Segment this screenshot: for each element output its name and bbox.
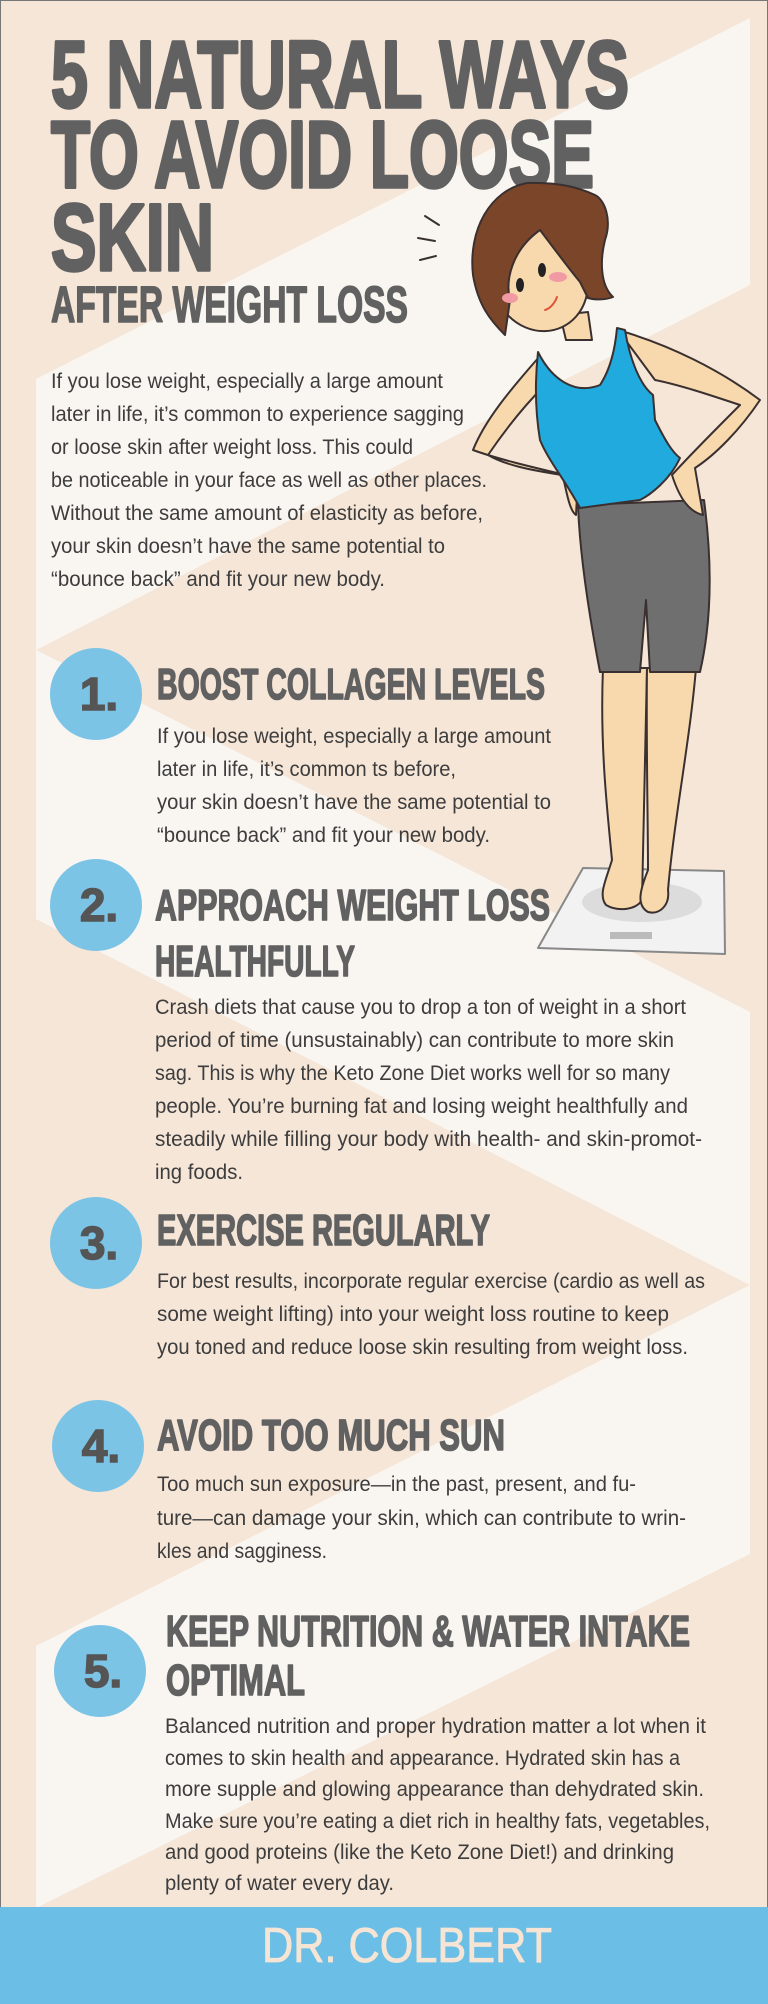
item 3: you toned and reduce loose skin resulting from weight loss. xyxy=(157,1336,688,1359)
title: AFTER WEIGHT LOSS xyxy=(51,276,408,333)
item 1: “bounce back” and fit your new body. xyxy=(157,824,490,847)
item 5: plenty of water every day. xyxy=(165,1872,394,1895)
intro text: later in life, it’s common to experience sagging xyxy=(51,403,464,426)
item 4 xyxy=(52,1400,686,1563)
item 2: Crash diets that cause you to drop a ton of weight in a short xyxy=(155,996,686,1019)
item 1: BOOST COLLAGEN LEVELS xyxy=(157,660,545,709)
item 3: some weight lifting) into your weight loss routine to keep xyxy=(157,1303,669,1326)
intro text: Without the same amount of elasticity as before, xyxy=(51,502,483,525)
item 5: Make sure you’re eating a diet rich in healthy fats, vegetables, xyxy=(165,1810,710,1833)
title: SKIN xyxy=(51,185,214,291)
item 5: OPTIMAL xyxy=(166,1656,305,1705)
item 4: ture—can damage your skin, which can contribute to wrin- xyxy=(157,1507,686,1530)
item 3 xyxy=(50,1197,705,1359)
intro text: “bounce back” and fit your new body. xyxy=(51,568,385,591)
item 2: ing foods. xyxy=(155,1161,243,1184)
item 2: people. You’re burning fat and losing weight healthfully and xyxy=(155,1095,688,1118)
head xyxy=(472,183,613,347)
item 4: Too much sun exposure—in the past, present, and fu- xyxy=(157,1473,636,1496)
item 5: comes to skin health and appearance. Hydrated skin has a xyxy=(165,1747,680,1770)
legs xyxy=(602,668,696,913)
icon: motion lines xyxy=(418,216,439,260)
item 2: APPROACH WEIGHT LOSS xyxy=(155,881,550,930)
item 5: and good proteins (like the Keto Zone Diet!) and drinking xyxy=(165,1841,674,1864)
item 2: HEALTHFULLY xyxy=(155,937,355,986)
item 5: 5. xyxy=(84,1645,122,1697)
item 4: kles and sagginess. xyxy=(157,1540,327,1563)
footer xyxy=(0,1907,768,2004)
tank top xyxy=(536,328,680,508)
item 5: more supple and glowing appearance than dehydrated skin. xyxy=(165,1778,704,1801)
item 2 xyxy=(50,859,702,1184)
item 3: EXERCISE REGULARLY xyxy=(157,1206,490,1255)
item 1: your skin doesn’t have the same potential to xyxy=(157,791,551,814)
item 2: sag. This is why the Keto Zone Diet works well for so many xyxy=(155,1062,670,1085)
intro text: your skin doesn’t have the same potential to xyxy=(51,535,445,558)
item 5 xyxy=(54,1607,710,1895)
intro text: be noticeable in your face as well as other places. xyxy=(51,469,487,492)
item 4: AVOID TOO MUCH SUN xyxy=(157,1411,505,1460)
item 5: Balanced nutrition and proper hydration matter a lot when it xyxy=(165,1715,706,1738)
item 1 xyxy=(50,648,551,847)
neck xyxy=(560,312,592,340)
arms xyxy=(473,356,578,515)
item 2: period of time (unsustainably) can contribute to more skin xyxy=(155,1029,674,1052)
scale xyxy=(538,868,725,954)
intro text xyxy=(51,370,487,591)
footer: DR. COLBERT xyxy=(262,1919,552,1973)
shorts xyxy=(578,500,710,672)
intro text: or loose skin after weight loss. This could xyxy=(51,436,413,459)
item 2: steadily while filling your body with health- and skin-promot- xyxy=(155,1128,702,1151)
item 3: 3. xyxy=(80,1217,118,1269)
illustration: woman on scale xyxy=(418,183,760,954)
item 1: 1. xyxy=(80,668,118,720)
intro text: If you lose weight, especially a large amount xyxy=(51,370,443,393)
item 2: 2. xyxy=(80,879,118,931)
item 1: If you lose weight, especially a large amount xyxy=(157,725,551,748)
item 3: For best results, incorporate regular exercise (cardio as well as xyxy=(157,1270,705,1293)
item 4: 4. xyxy=(82,1420,120,1472)
title xyxy=(51,22,629,333)
item 1: later in life, it’s common ts before, xyxy=(157,758,456,781)
